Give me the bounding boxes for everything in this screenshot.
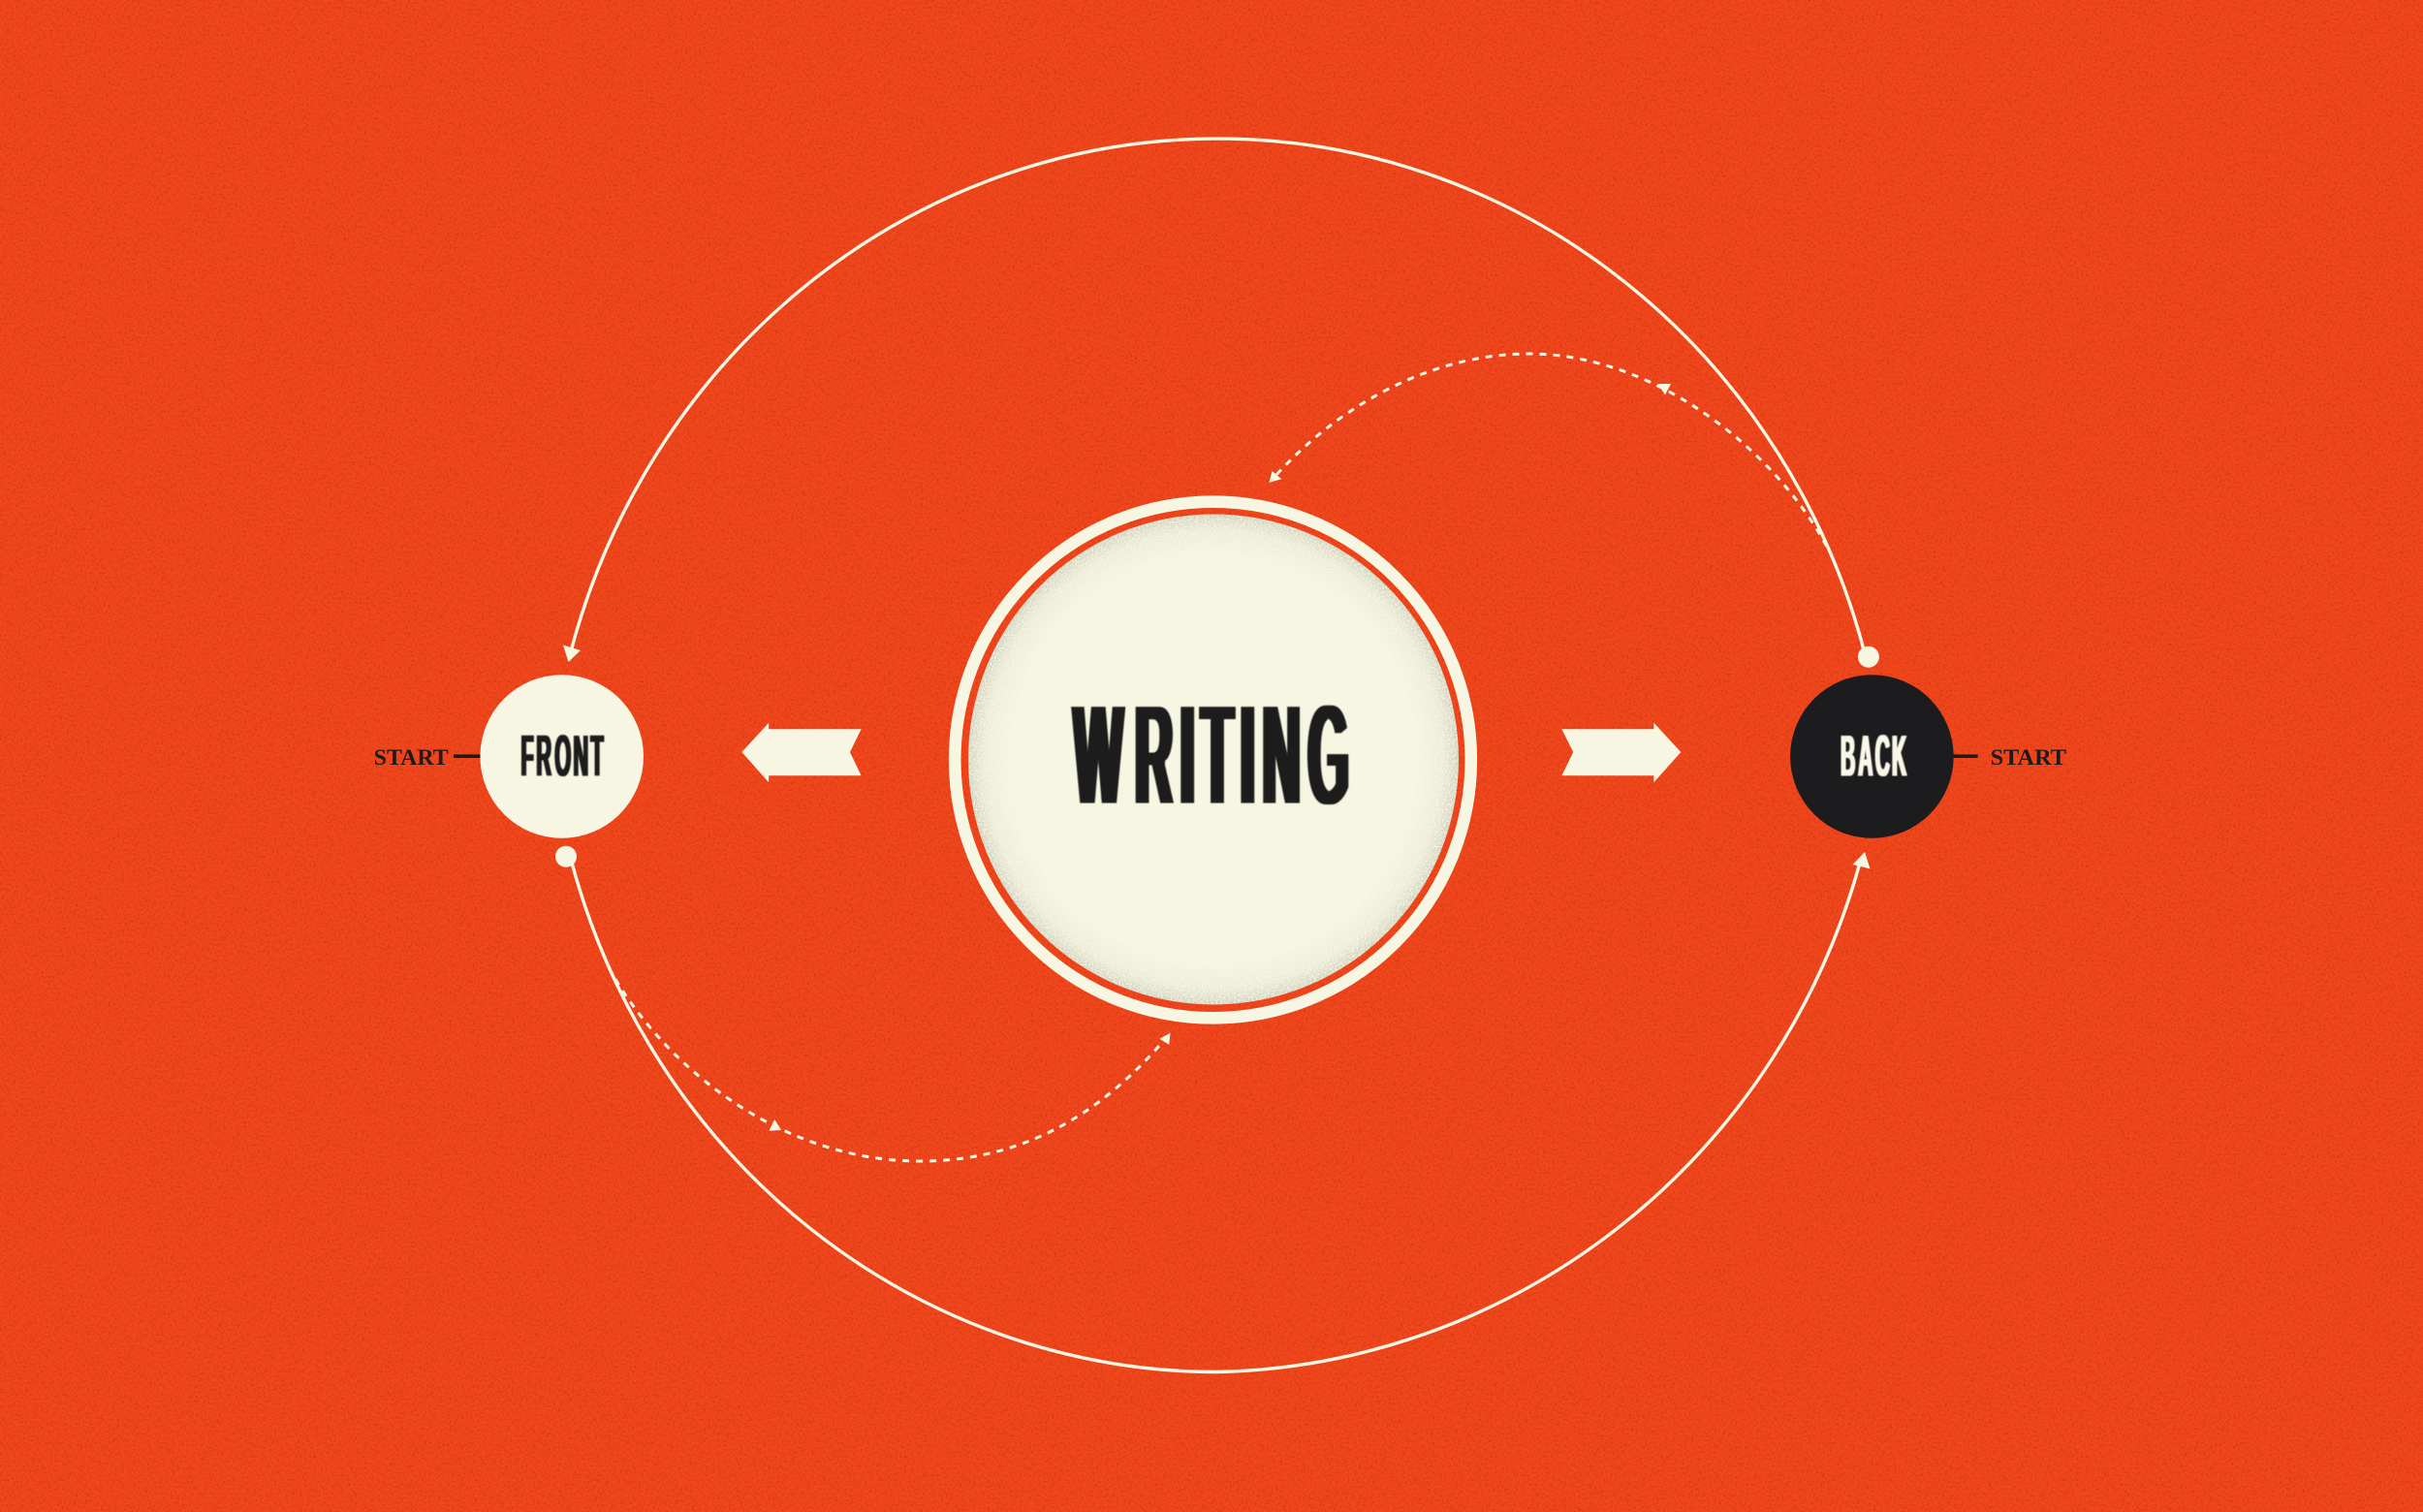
- start marker: back: [1954, 745, 2066, 771]
- central circle: writing: [955, 502, 1471, 1018]
- icon: arrowhead into back: [1853, 852, 1871, 868]
- icon: arrowhead into front: [563, 646, 581, 662]
- label: FRONT: FRONT: [520, 723, 604, 789]
- outer loop: top arc from back to front: [563, 139, 1866, 662]
- heading: WRITING: WRITING: [1074, 674, 1349, 835]
- start marker: front: [374, 745, 481, 771]
- outer loop: bottom arc from front to back: [572, 852, 1871, 1372]
- inner loop: dashed arc from back to writing: [1269, 354, 1833, 558]
- icon: end arrowhead bottom: [1159, 1033, 1171, 1045]
- start marker: back: START: [1991, 745, 2066, 771]
- icon: mid-arc arrowhead top: [1658, 384, 1671, 395]
- node: front: [480, 675, 644, 838]
- arrow: writing to back: [1561, 723, 1681, 782]
- icon: end arrowhead top: [1269, 471, 1281, 483]
- icon: mid-arc arrowhead bottom: [769, 1119, 781, 1131]
- dot: front outbound start: [555, 846, 577, 867]
- node: back: [1790, 675, 1954, 838]
- arrow: writing to front: [741, 723, 862, 782]
- label: BACK: BACK: [1841, 723, 1906, 789]
- dot: back outbound start: [1858, 646, 1879, 668]
- start marker: front: START: [374, 745, 449, 771]
- inner loop: dashed arc from front to writing: [609, 967, 1171, 1161]
